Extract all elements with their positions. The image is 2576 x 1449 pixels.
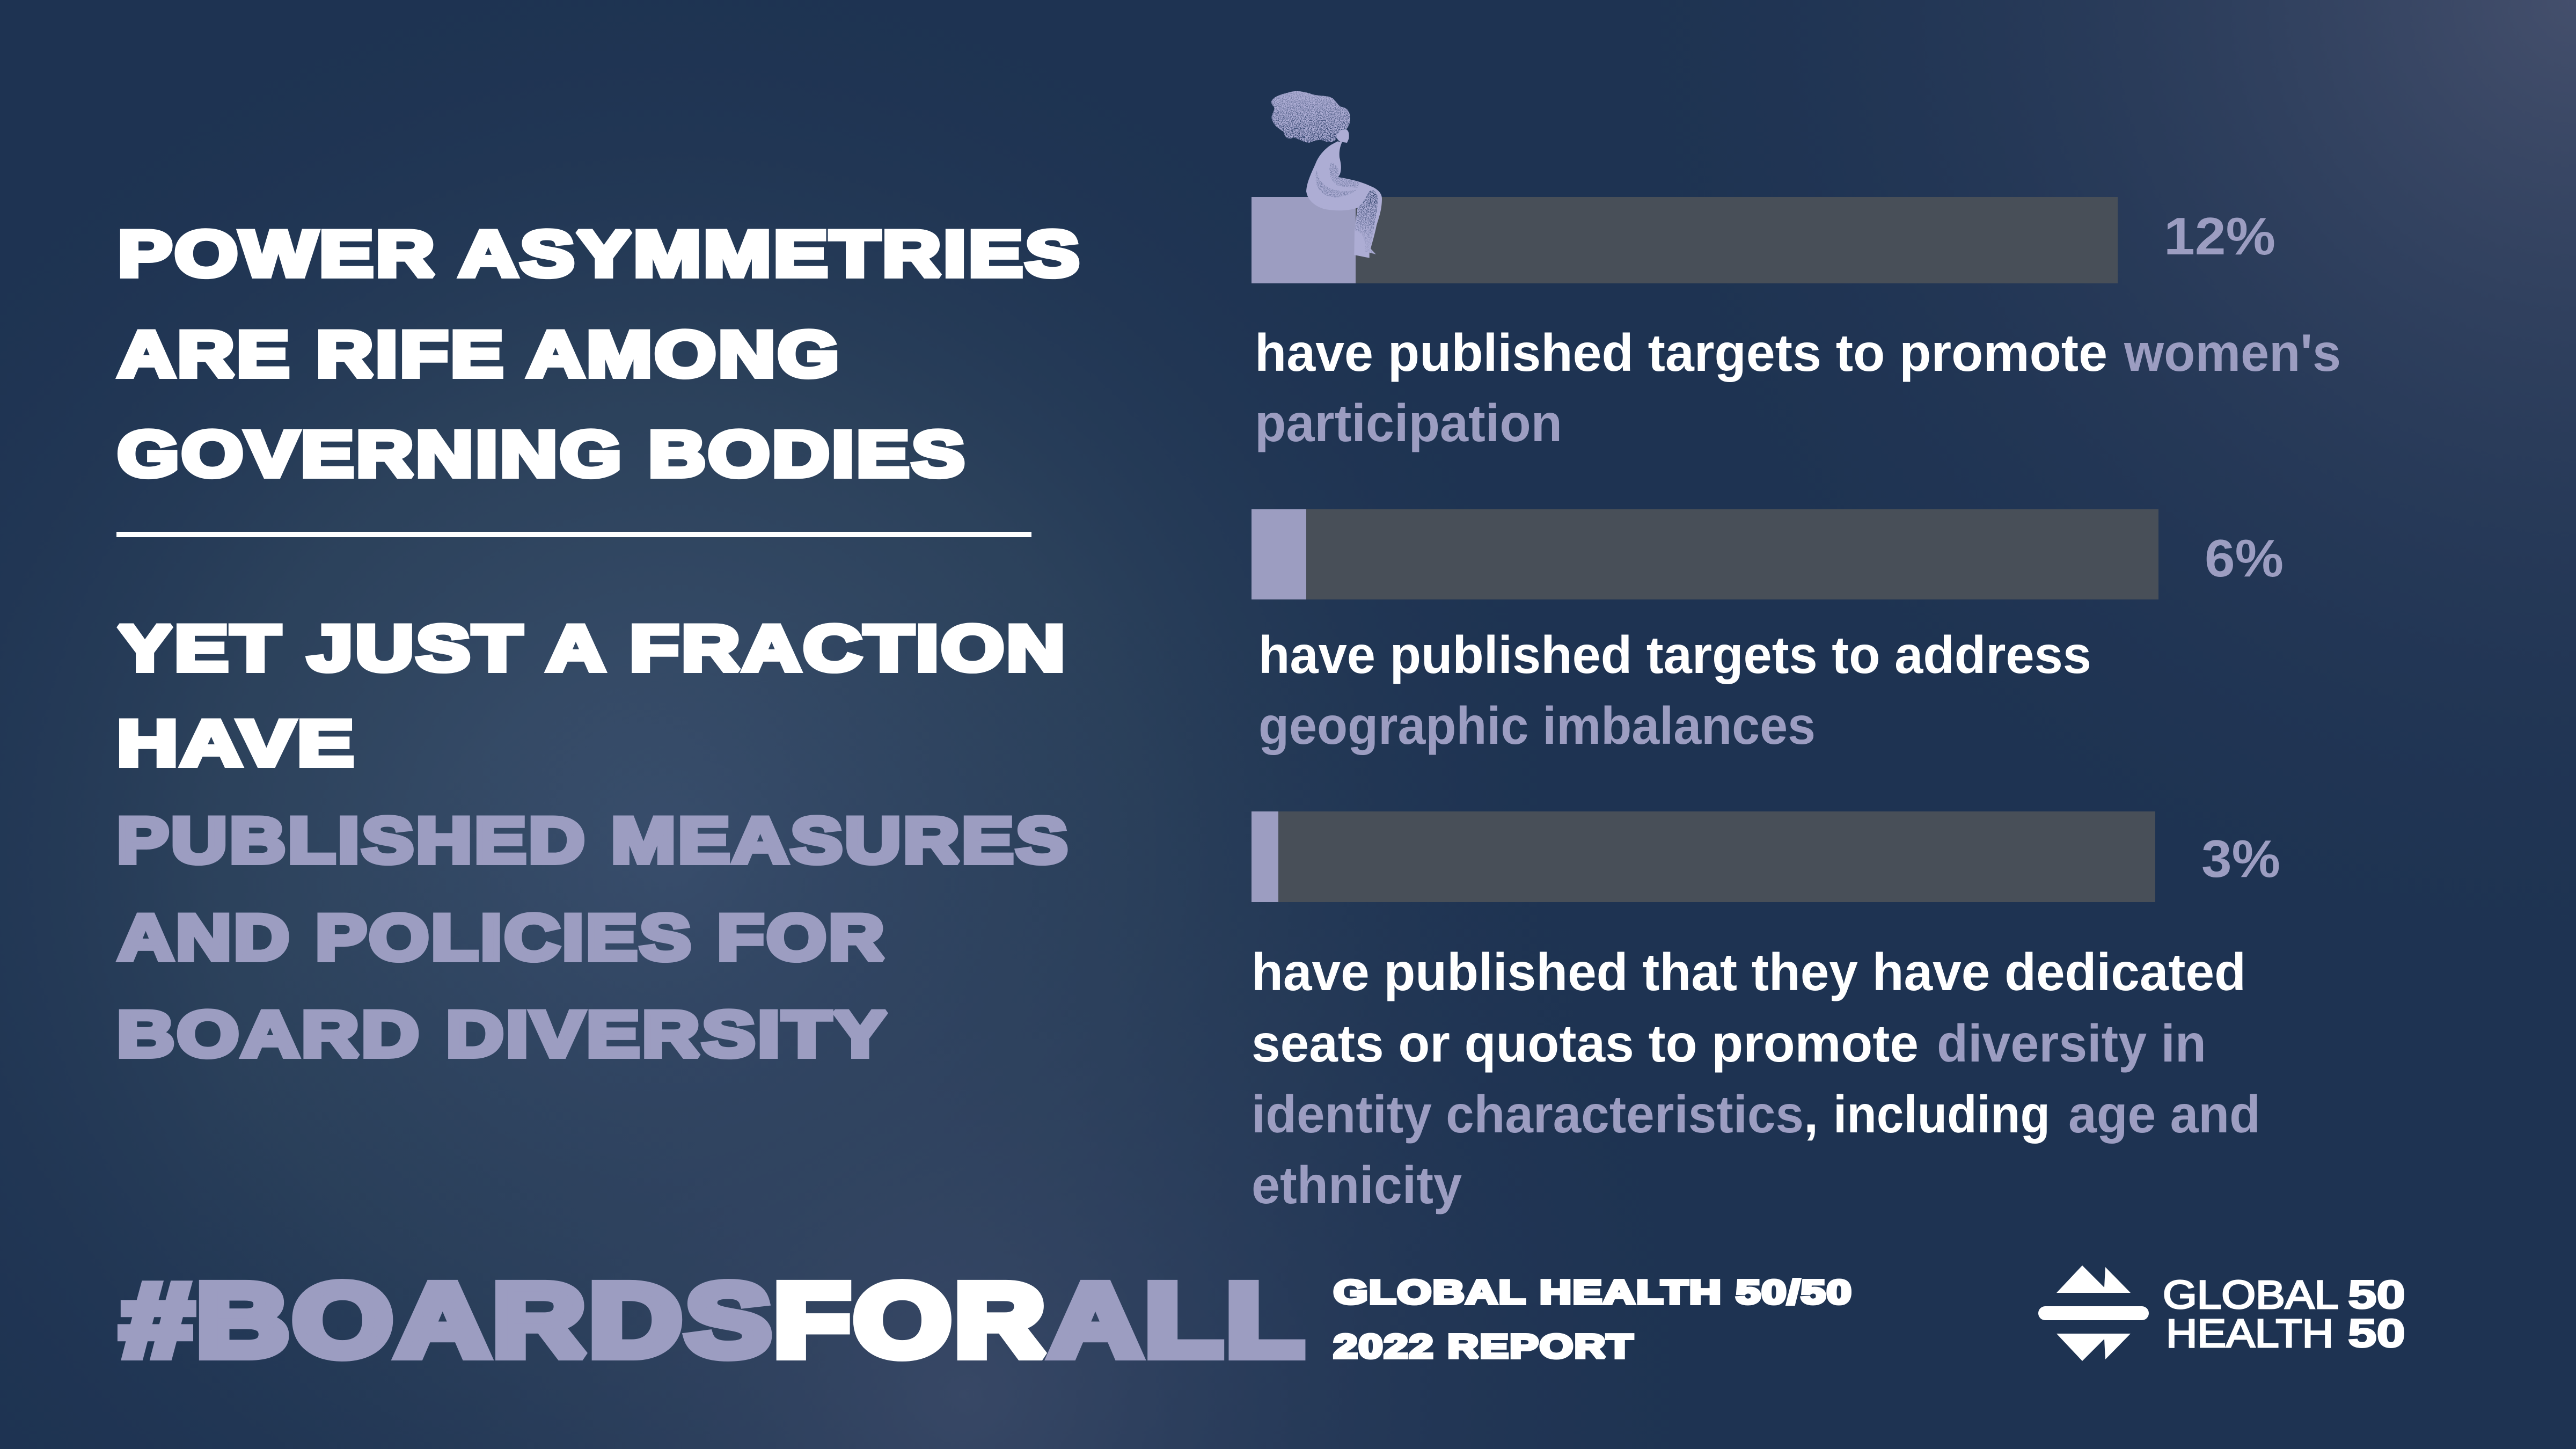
text: geographic imbalances <box>1258 625 2091 755</box>
hashtag: boards for all: #BOARDS <box>121 1262 775 1378</box>
bar 1: 12% <box>1252 197 2118 283</box>
value: 6%: 6% <box>2205 529 2284 588</box>
heading: power asymmetries: ARE RIFE AMONG <box>118 318 841 390</box>
text: dedicated seats or quotas: age and <box>2068 1085 2260 1144</box>
text: dedicated seats or quotas: including <box>1833 1085 2050 1144</box>
icon: seated woman with flowing hair <box>1271 91 1382 258</box>
heading: yet just a fraction <box>117 612 1070 1070</box>
logo: global health 50/50: 50 <box>2348 1311 2405 1356</box>
bar 3: 3% <box>1252 811 2155 902</box>
logo: global health 50/50: HEALTH <box>2166 1311 2333 1356</box>
report label: 2022 REPORT <box>1334 1328 1634 1365</box>
value: 12%: 12% <box>2164 207 2275 266</box>
hashtag: boards for all <box>121 1262 1307 1378</box>
text: dedicated seats or quotas <box>1252 942 2260 1214</box>
hashtag: boards for all: ALL <box>1050 1262 1307 1378</box>
heading: power asymmetries: POWER ASYMMETRIES <box>118 218 1082 290</box>
text: dedicated seats or quotas: have published that they have dedicated <box>1252 942 2246 1001</box>
text: women's participation: have published targets to promote <box>1255 323 2107 382</box>
hashtag: boards for all: FOR <box>774 1262 1049 1378</box>
text: dedicated seats or quotas: identity characteristics <box>1252 1085 1804 1144</box>
logo: global health 50/50: 50 <box>2348 1272 2405 1317</box>
text: dedicated seats or quotas: diversity in <box>1937 1014 2206 1073</box>
text: geographic imbalances: geographic imbalances <box>1258 696 1816 755</box>
text: dedicated seats or quotas: ethnicity <box>1252 1155 1462 1214</box>
heading: yet just a fraction: HAVE <box>117 707 356 779</box>
text: women's participation <box>1255 323 2341 452</box>
heading: yet just a fraction: BOARD DIVERSITY <box>117 998 889 1070</box>
value: 3%: 3% <box>2201 829 2280 888</box>
logo: global health 50/50: GLOBAL <box>2163 1272 2339 1317</box>
text: dedicated seats or quotas: , <box>1804 1085 1818 1144</box>
heading: power asymmetries <box>118 218 1082 490</box>
text: geographic imbalances: have published targets to address <box>1258 625 2091 684</box>
heading: yet just a fraction: AND POLICIES FOR <box>118 902 887 974</box>
logo: global health 50/50 <box>2038 1265 2405 1361</box>
report label: GLOBAL HEALTH 50/50 <box>1334 1274 1853 1311</box>
text: women's participation: women's <box>2124 323 2341 382</box>
report label <box>1334 1274 1853 1365</box>
text: dedicated seats or quotas: seats or quotas to promote <box>1252 1014 1919 1073</box>
heading: yet just a fraction: PUBLISHED MEASURES <box>117 804 1070 876</box>
heading: power asymmetries: GOVERNING BODIES <box>118 418 967 490</box>
bar 2: 6% <box>1252 509 2158 599</box>
heading: yet just a fraction: YET JUST A FRACTION <box>118 612 1067 684</box>
text: women's participation: participation <box>1255 393 1562 452</box>
